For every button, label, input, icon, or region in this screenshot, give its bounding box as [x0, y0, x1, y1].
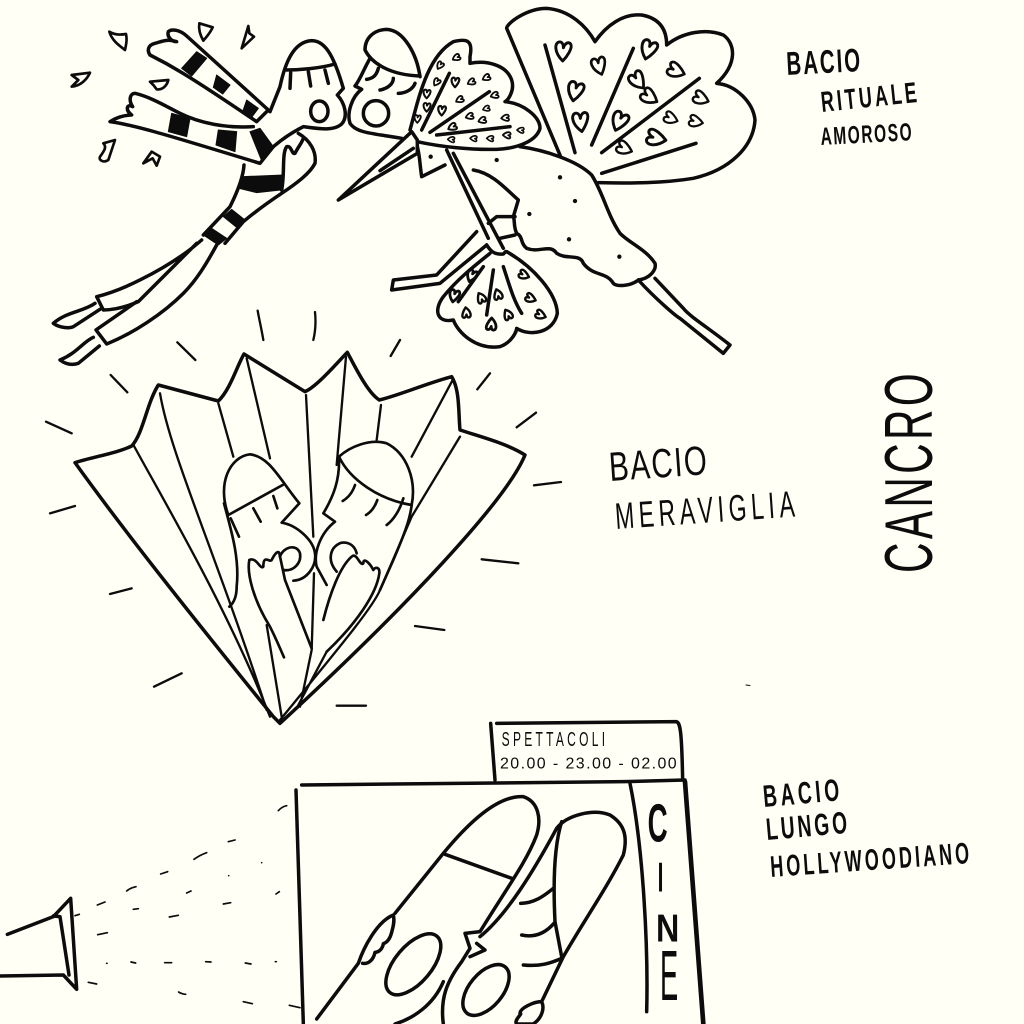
illustration: woman with striped scarf [53, 23, 345, 364]
man arm and leg [392, 150, 515, 290]
left lover [224, 454, 315, 657]
text block: Bacio rituale amoroso: AMOROSO [820, 119, 912, 151]
cinema sign letters: N [656, 906, 679, 950]
showtimes sign: 20.00 - 23.00 - 02.00 [500, 756, 677, 773]
text block: Bacio rituale amoroso: BACIO [785, 41, 861, 82]
big wing [507, 8, 755, 183]
upper scarf [148, 30, 268, 122]
text block: Bacio rituale amoroso: RITUALE [819, 77, 918, 119]
text block: Bacio rituale amoroso [785, 41, 918, 151]
left face on screen [317, 797, 539, 1024]
lower wing hearts [448, 269, 547, 330]
text block: Bacio meraviglia [607, 438, 796, 537]
cinema sign letters: I [658, 854, 663, 901]
right lover [316, 442, 413, 652]
fan folds [134, 357, 460, 720]
cinema sign letters [648, 795, 679, 1016]
radiating rays [46, 340, 561, 706]
cinema sign letters: E [660, 937, 678, 1016]
text block: Bacio lungo hollywoodiano: LUNGO [765, 807, 849, 847]
woman head [270, 41, 345, 147]
big wing hearts [556, 39, 711, 157]
woman legs and feet [53, 240, 217, 364]
right face on screen [454, 812, 625, 1024]
small wing marks [415, 53, 524, 142]
text block: Bacio lungo hollywoodiano: BACIO [762, 774, 841, 814]
showtimes sign: SPETTACOLI [502, 729, 605, 751]
cinema sign letters: C [648, 795, 668, 854]
beak [338, 132, 417, 200]
icon: projector [0, 898, 77, 989]
bird body and tail [417, 147, 730, 353]
rays above fan [177, 311, 315, 360]
text block: Bacio meraviglia: BACIO [607, 438, 708, 490]
lower scarf [110, 93, 273, 163]
small wing [410, 40, 540, 149]
man head [349, 29, 420, 138]
fan outline [75, 352, 525, 723]
illustration: man with bird costume [338, 8, 755, 353]
icon: floating hearts [72, 23, 254, 166]
text block: Bacio lungo hollywoodiano: HOLLYWOODIANO [769, 838, 970, 884]
illustration: fan with kissing couple [46, 340, 561, 723]
title: Cancro: CANCRO [871, 373, 946, 573]
building walls [296, 780, 703, 1024]
small lower wing [438, 252, 557, 347]
showtimes sign [491, 722, 683, 780]
projector light beam dashes [75, 806, 300, 1008]
text block: Bacio meraviglia: MERAVIGLIA [614, 483, 796, 537]
illustration: cinema building [296, 722, 703, 1024]
small stray mark [746, 684, 750, 686]
text block: Bacio lungo hollywoodiano [762, 774, 970, 884]
woman body and arm [203, 133, 315, 245]
